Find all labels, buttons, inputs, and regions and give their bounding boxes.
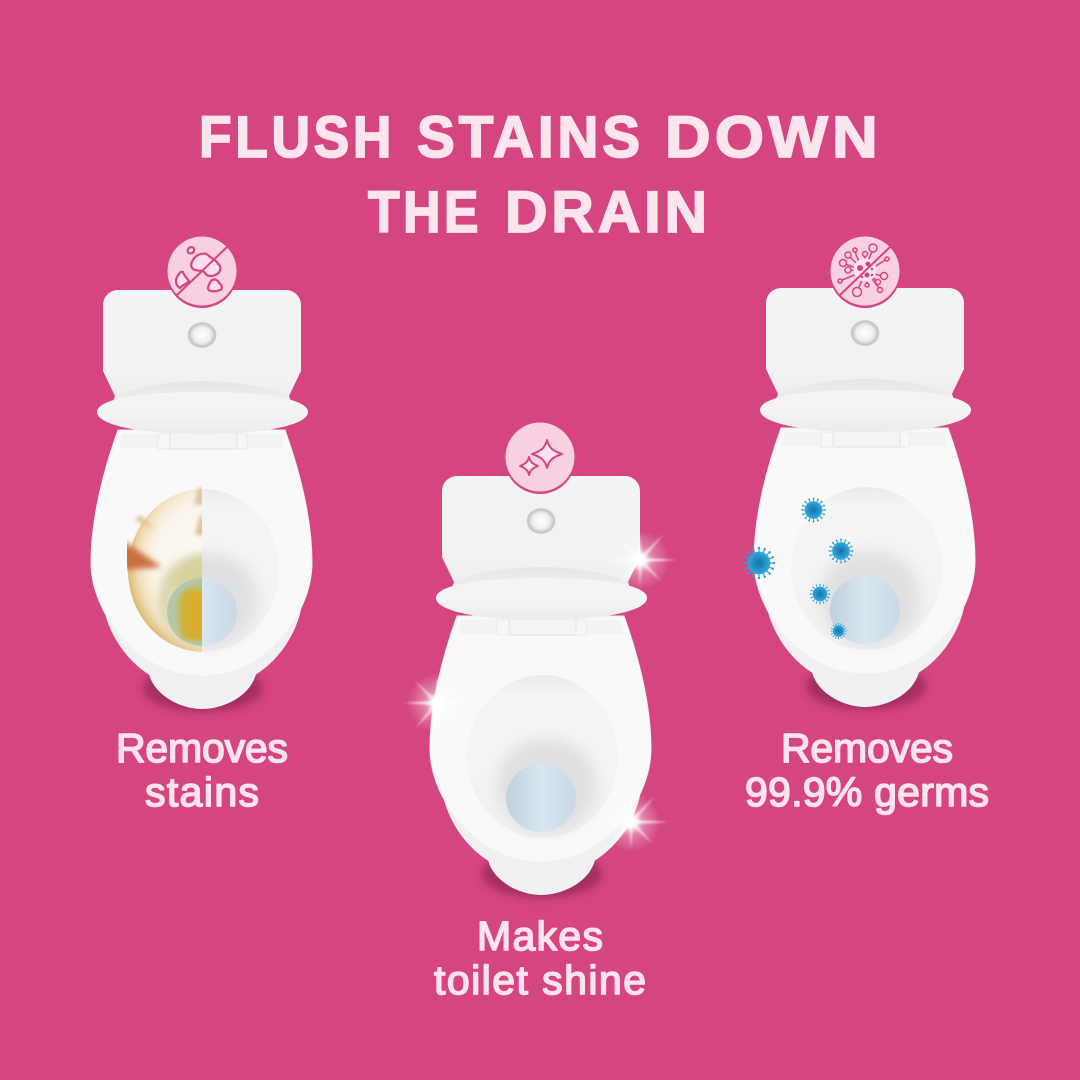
label: removes 99.9% germs: Removes — [781, 725, 953, 771]
title: THE — [368, 180, 482, 245]
icon: no stains badge — [166, 236, 238, 308]
label: removes stains: Removes — [116, 725, 288, 771]
title — [199, 105, 882, 245]
germ 2 — [829, 539, 853, 563]
icon: no germs badge — [830, 236, 900, 308]
germ outline with spikes — [838, 244, 889, 296]
germ 1 — [801, 498, 826, 522]
title: FLUSH — [199, 105, 395, 170]
sparkle: bowl right — [597, 792, 669, 852]
toilet illustration: stained bowl — [91, 290, 312, 712]
toilet illustration: with germs — [743, 288, 975, 710]
sparkle: tank — [606, 530, 678, 590]
label: removes 99.9% germs — [745, 725, 989, 815]
title: STAINS — [417, 105, 644, 170]
label: makes toilet shine: toilet shine — [434, 957, 646, 1003]
title: DOWN — [665, 105, 882, 170]
panel: makes toilet shine — [403, 422, 678, 1003]
germ 4 — [810, 584, 830, 604]
label: removes stains — [116, 725, 288, 815]
title: DRAIN — [505, 180, 711, 245]
germ 5 — [830, 623, 847, 639]
stain overlay on left half of the bowl — [127, 486, 202, 652]
panel: removes germs — [743, 236, 989, 815]
germ 3 — [743, 547, 775, 579]
label: makes toilet shine: Makes — [477, 913, 603, 959]
label: makes toilet shine — [434, 913, 646, 1003]
sparkle: bowl left — [403, 673, 475, 733]
label: removes stains: stains — [145, 769, 259, 815]
panel: removes stains — [91, 236, 312, 815]
toilet illustration: clean with sparkles — [403, 476, 678, 898]
icon: sparkle badge — [504, 422, 576, 494]
label: removes 99.9% germs: 99.9% germs — [745, 769, 989, 815]
